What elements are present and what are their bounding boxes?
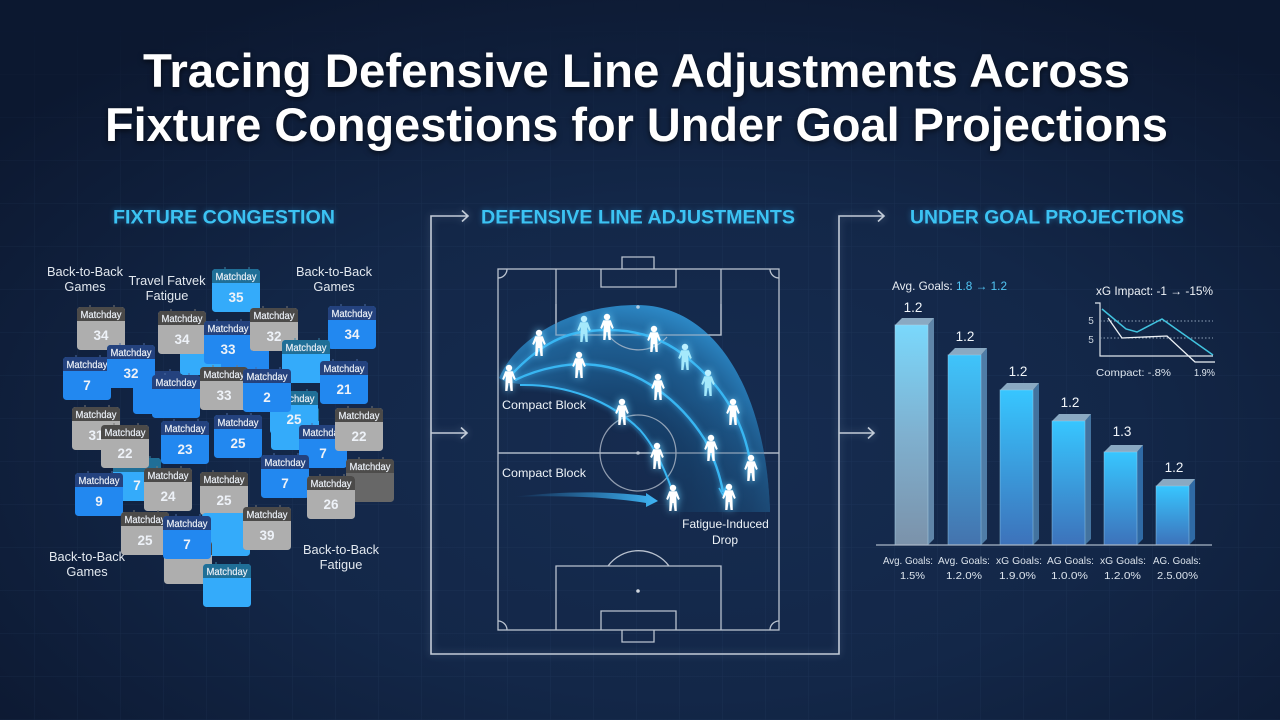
bar values: 1.2 — [1061, 395, 1079, 410]
inset line chart: xG impact — [1088, 284, 1215, 379]
calendar card 31: Matchday — [76, 410, 116, 421]
calendar card 39 — [243, 505, 291, 550]
caption: back-to-back games top left: Games — [64, 279, 106, 294]
inset heading: xG Impact: -1 → -15% — [1096, 284, 1213, 298]
calendar card 25 grey: Matchday — [204, 475, 244, 486]
label: fatigue-induced drop: Fatigue-Induced — [682, 517, 769, 531]
heading: fixture congestion: FIXTURE CONGESTION — [113, 208, 335, 228]
bar 4 — [1052, 414, 1091, 545]
calendar card 7 — [63, 355, 111, 400]
bar axis labels: Avg. Goals: — [938, 555, 990, 567]
heading: under goal projections: UNDER GOAL PROJECTIONS — [910, 208, 1184, 228]
panel frame and connector arrows — [431, 210, 884, 654]
inset cyan line — [1102, 309, 1213, 355]
calendar card 22 right: 22 — [351, 429, 367, 444]
caption: travel fatigue: Fatigue — [146, 288, 188, 303]
bar values: 1.2 — [956, 329, 974, 344]
bar 5 — [1104, 445, 1143, 545]
calendar card 31: 31 — [88, 428, 104, 443]
calendar card light back lower — [271, 405, 319, 450]
bar axis labels: 1.5% — [900, 570, 925, 582]
calendar card 26: 26 — [323, 497, 339, 512]
caption: back-to-back games top right: Back-to-Back — [296, 264, 372, 279]
calendar card 9: Matchday — [78, 476, 120, 487]
panel: football pitch — [498, 257, 779, 642]
defensive zone shading — [499, 305, 770, 512]
caption: back-to-back games bottom left: Games — [66, 564, 108, 579]
calendar card 25 low — [121, 510, 169, 555]
calendar card 25 grey — [200, 470, 248, 515]
bar axis labels: xG Goals: — [1100, 555, 1146, 567]
bar axis labels: 1.2.0% — [1104, 570, 1141, 582]
calendar card 25 light: Matchday — [274, 394, 314, 405]
calendar card 32: Matchday — [110, 348, 152, 359]
caption: back-to-back fatigue: Back-to-Back — [303, 542, 379, 557]
bar chart — [876, 300, 1212, 582]
label: fatigue-induced drop: Drop — [712, 533, 738, 547]
calendar card 25 blue — [214, 413, 262, 458]
inset axis numbers: 5 — [1088, 316, 1094, 327]
calendar card 7 mid: 7 — [281, 476, 289, 491]
calendar card 2: 2 — [263, 390, 271, 405]
calendar card 22 — [101, 423, 149, 468]
calendar card dark grey: Matchday — [350, 462, 390, 473]
calendar card 35: Matchday — [216, 272, 256, 283]
calendar card 39: 39 — [259, 528, 275, 543]
calendar card 24: 24 — [160, 489, 176, 504]
label: compact block lower: Compact Block — [502, 466, 587, 480]
title — [105, 44, 1168, 151]
calendar card 21: 21 — [336, 382, 352, 397]
calendar card 33 grey: 33 — [216, 388, 232, 403]
calendar card 34 blue: 34 — [344, 327, 360, 342]
caption: back-to-back fatigue: Fatigue — [320, 557, 362, 572]
calendar card 23: 23 — [177, 442, 193, 457]
calendar card dark grey — [346, 457, 394, 502]
bar axis labels: xG Goals: — [996, 555, 1042, 567]
calendar card grey back bottom — [164, 539, 212, 584]
calendar card 7 light — [113, 456, 161, 501]
calendar card 7 mid — [261, 453, 309, 498]
caption: travel fatigue: Travel Fatvek — [128, 273, 206, 288]
calendar card 31 — [72, 405, 120, 450]
arrow: left to middle — [431, 428, 467, 438]
calendar card blue blank: Matchday — [156, 378, 196, 389]
calendar card 32 — [107, 343, 155, 388]
inset axes and gridlines — [1095, 303, 1213, 356]
bar axis labels: 1.0.0% — [1051, 570, 1088, 582]
calendar card 34 blue — [328, 304, 376, 349]
calendar card 33: Matchday — [208, 324, 248, 335]
calendar card light bottom — [203, 562, 251, 607]
calendar card 34 grey: 34 — [174, 332, 190, 347]
bar axis labels: AG. Goals: — [1153, 555, 1201, 567]
calendar card 22 right: Matchday — [338, 411, 380, 422]
calendar card 22: 22 — [117, 446, 133, 461]
arrow: middle to right — [839, 428, 874, 438]
heading: defensive line adjustments: DEFENSIVE LINE ADJUSTMENTS — [481, 208, 795, 228]
calendar card 7 right: 7 — [319, 446, 327, 461]
calendar card 7 right — [299, 423, 347, 468]
calendar card 34 — [77, 305, 125, 350]
calendar card 25 grey: 25 — [216, 493, 232, 508]
calendar card light blank: Matchday — [286, 343, 326, 354]
calendar card 25 low: Matchday — [124, 515, 166, 526]
frame with arrow into defensive heading — [431, 210, 884, 654]
calendar card light back — [180, 330, 228, 375]
calendar card light bottom: Matchday — [206, 567, 248, 578]
chart heading: average goals: Avg. Goals: 1.8 → 1.2 — [892, 279, 1007, 293]
calendar card blue blank — [152, 373, 200, 418]
calendar card 39: Matchday — [246, 510, 288, 521]
calendar card 25 blue: 25 — [230, 436, 246, 451]
inset caption left: Compact: -.8% — [1096, 367, 1171, 379]
calendar card 32 grey — [250, 306, 298, 351]
inset white line — [1108, 318, 1215, 362]
title: Tracing Defensive Line Adjustments Across — [143, 44, 1130, 97]
calendar card blue back right — [221, 335, 269, 380]
calendar card 32: 32 — [123, 366, 139, 381]
bar values: 1.2 — [1009, 364, 1027, 379]
calendar card 23: Matchday — [164, 424, 206, 435]
calendar card 9: 9 — [95, 494, 103, 509]
label: compact block upper: Compact Block — [502, 398, 587, 412]
calendar card 34: 34 — [93, 328, 109, 343]
calendar card 33 — [204, 319, 252, 364]
bar values: 1.2 — [904, 300, 922, 315]
inset axis numbers — [1088, 316, 1094, 346]
bar 3 — [1000, 383, 1039, 545]
caption: back-to-back games top right: Games — [313, 279, 355, 294]
calendar card 34 grey — [158, 309, 206, 354]
calendar card 7 light: 7 — [133, 478, 141, 493]
calendar card 7: 7 — [83, 378, 91, 393]
bar axis labels — [883, 555, 1201, 582]
calendar card light back bottom — [202, 513, 250, 556]
caption: back-to-back games top left: Back-to-Back — [47, 264, 123, 279]
calendar card 7 right: Matchday — [302, 428, 344, 439]
calendar card 22 right — [335, 406, 383, 451]
bar axis labels: 2.5.00% — [1157, 570, 1198, 582]
calendar card 26: Matchday — [310, 479, 352, 490]
calendar card 7 mid: Matchday — [264, 458, 306, 469]
calendar card 32 grey: Matchday — [254, 311, 294, 322]
calendar card blue back — [133, 369, 181, 414]
bar values: 1.2 — [1165, 460, 1183, 475]
bar axis labels: 1.2.0% — [946, 570, 982, 582]
players — [502, 314, 758, 511]
calendar card 35 — [212, 267, 260, 312]
calendar card 21 — [320, 359, 368, 404]
inset dotted gridlines — [1100, 321, 1213, 338]
bar values: 1.3 — [1113, 424, 1131, 439]
bar axis labels: 1.9.0% — [999, 570, 1036, 582]
calendar card light blank — [282, 338, 330, 383]
calendar card 34 grey: Matchday — [162, 314, 202, 325]
calendar card 23 — [161, 419, 209, 464]
calendar card 22: Matchday — [104, 428, 146, 439]
bar axis labels: AG Goals: — [1047, 555, 1094, 567]
defensive line arcs — [513, 330, 751, 495]
inset axis numbers: 5 — [1088, 335, 1094, 346]
calendar card 21: Matchday — [324, 364, 364, 375]
bar 2 — [948, 348, 987, 545]
calendar card 2 — [243, 367, 291, 412]
panel: under goal projections — [876, 279, 1215, 582]
calendar card 25 light: 25 — [286, 412, 302, 427]
calendar card 24: Matchday — [148, 471, 188, 482]
calendar card 33 grey: Matchday — [204, 370, 244, 381]
pitch markings over zone — [498, 304, 779, 491]
calendar card 7 low: Matchday — [166, 519, 208, 530]
calendar card 7: Matchday — [66, 360, 108, 371]
caption: back-to-back games bottom left: Back-to-Back — [49, 549, 125, 564]
calendar card 32 grey: 32 — [266, 329, 282, 344]
calendar card 33: 33 — [220, 342, 236, 357]
calendar card 25 blue: Matchday — [218, 418, 258, 429]
pitch markings — [498, 257, 779, 642]
calendar card 25 light — [270, 389, 318, 434]
calendar card 34: Matchday — [80, 310, 122, 321]
calendar card 26 — [307, 474, 355, 519]
calendar card 35: 35 — [228, 290, 244, 305]
arrow: fatigue drop — [513, 492, 658, 507]
inset caption right: 1.9% — [1194, 367, 1215, 379]
bar 6 — [1156, 479, 1195, 545]
panel: fixture congestion calendars — [47, 264, 394, 607]
calendar card 24 — [144, 466, 192, 511]
calendar card 7 low: 7 — [183, 537, 191, 552]
bar axis labels: Avg. Goals: — [883, 555, 933, 567]
bar values — [904, 300, 1183, 475]
calendar card 7 low — [163, 514, 211, 559]
title: Fixture Congestions for Under Goal Projections — [105, 98, 1168, 151]
calendar card 34 blue: Matchday — [332, 309, 372, 320]
calendar card 9 — [75, 471, 123, 516]
calendar card 2: Matchday — [246, 372, 288, 383]
baseline axis — [876, 544, 1212, 546]
bar 1 — [895, 318, 934, 545]
calendar card 25 low: 25 — [137, 533, 153, 548]
calendar card 33 grey — [200, 365, 248, 410]
